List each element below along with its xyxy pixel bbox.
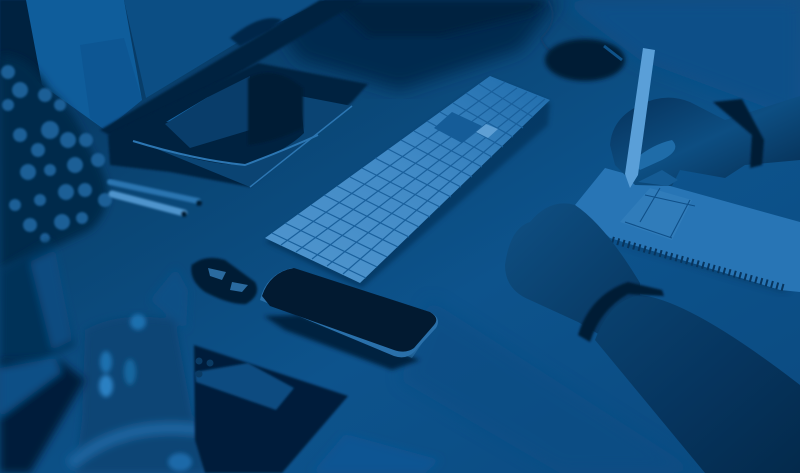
smartphone (260, 268, 438, 370)
wrist band (578, 282, 664, 342)
lower hand and forearm (505, 203, 800, 473)
wrist bracelet (713, 99, 764, 168)
upper hand with pen (610, 48, 800, 188)
plant (0, 55, 112, 270)
plant vase (0, 240, 75, 362)
glass of water (70, 268, 208, 473)
pen (625, 48, 655, 188)
bottom paper (312, 434, 440, 473)
computer monitor (0, 0, 362, 142)
mouse (545, 39, 625, 81)
water glass highlights (99, 314, 192, 471)
dark object at top of desk (330, 0, 556, 54)
left foreground books (0, 358, 85, 473)
pens (110, 182, 202, 217)
keyboard (265, 76, 550, 288)
monitor stand (108, 63, 368, 187)
car key fob (191, 258, 257, 304)
notebook (575, 168, 800, 292)
dark tablet and box (194, 345, 348, 473)
